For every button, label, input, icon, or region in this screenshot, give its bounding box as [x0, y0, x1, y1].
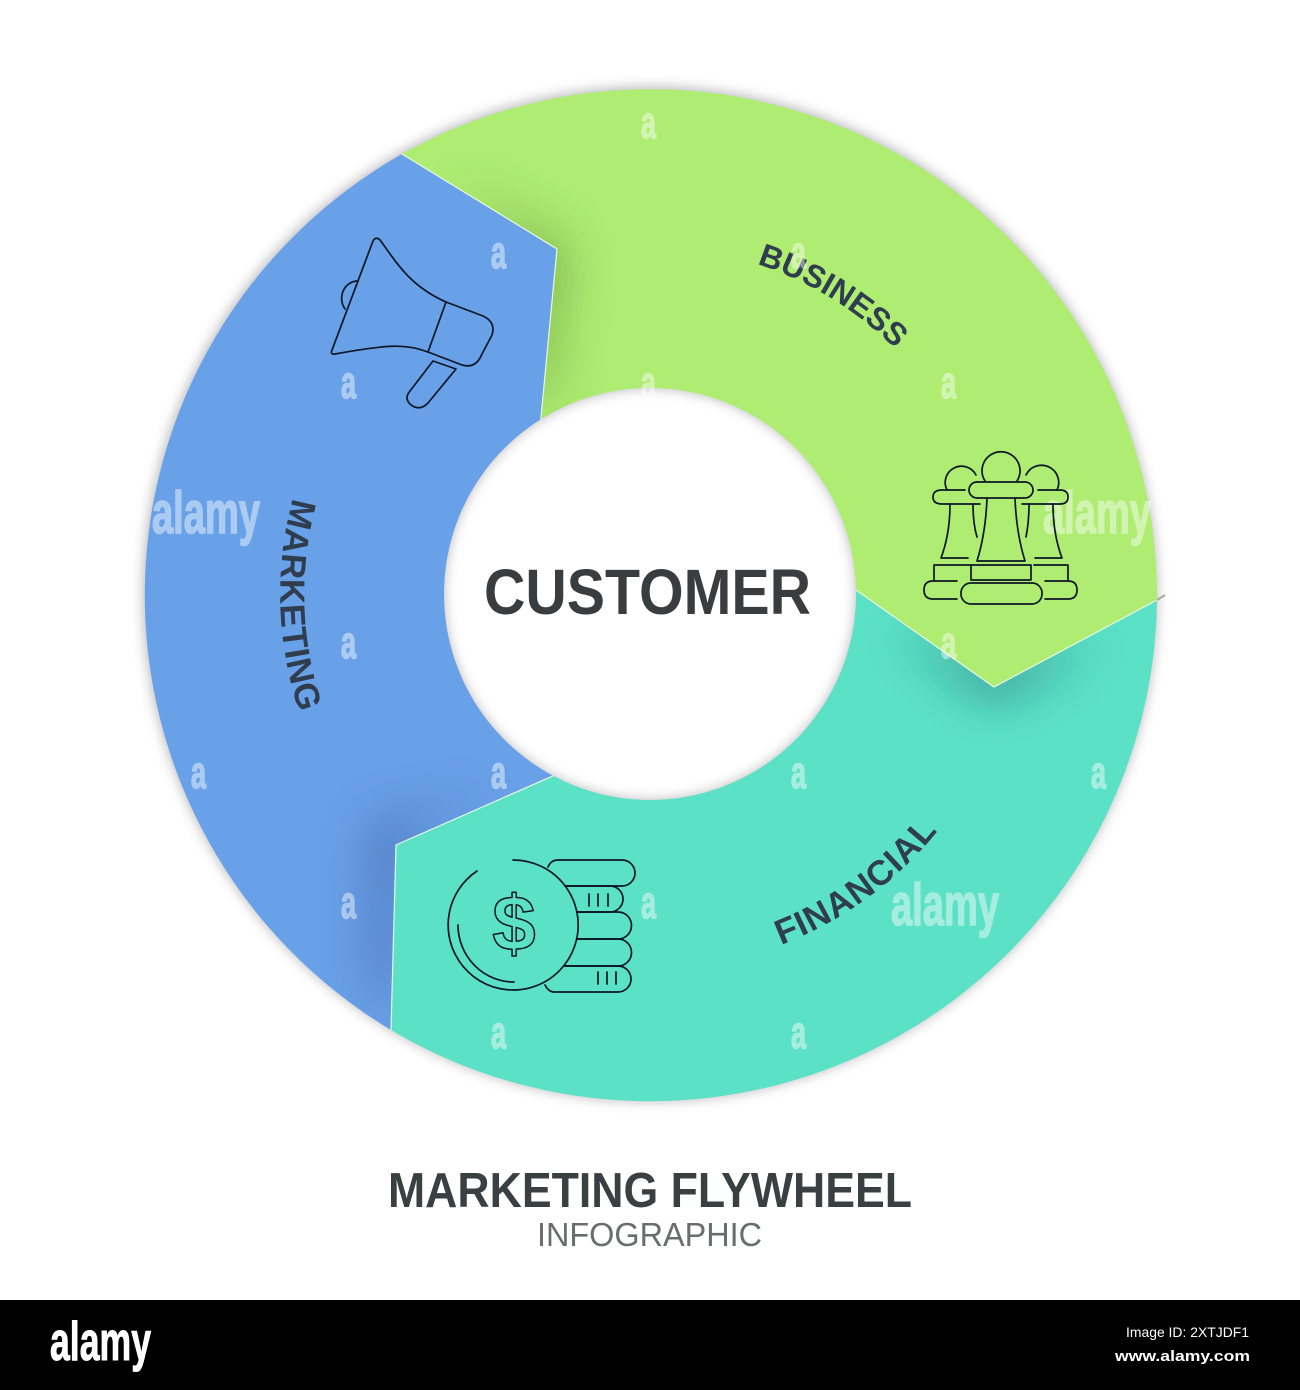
watermark letters: a: [491, 1007, 507, 1058]
watermark letters: a: [941, 617, 957, 668]
watermark letters: a: [341, 357, 357, 408]
heading: marketing flywheel: MARKETING FLYWHEEL: [388, 1164, 912, 1218]
watermark letters: a: [641, 877, 657, 928]
icon: chess pieces: [924, 452, 1077, 604]
watermark letters: alamy: [891, 872, 999, 938]
shadow cast on teal segment: [890, 625, 1100, 700]
segment edge highlights: [391, 154, 1157, 1030]
edge artifact: [1157, 595, 1165, 600]
watermark over business label: a: [791, 227, 807, 278]
watermark letters: a: [641, 97, 657, 148]
watermark letters: a: [341, 617, 357, 668]
watermark letters: a: [491, 747, 507, 798]
icon: dollar coins: $: [492, 879, 536, 967]
watermark letters: alamy: [1043, 480, 1151, 546]
center title: customer: CUSTOMER: [484, 556, 811, 628]
watermark letters: a: [1091, 747, 1107, 798]
footer url: www.alamy.com: [1114, 1348, 1250, 1365]
footer bar: [0, 1300, 1300, 1390]
footer logo: alamy: [50, 1310, 151, 1372]
watermark letters: a: [791, 747, 807, 798]
icon: megaphone: [331, 238, 493, 408]
icon: dollar coins: [448, 860, 635, 992]
shadow cast on blue segment: [348, 798, 448, 1004]
label: business: BUSINESS: [759, 244, 907, 346]
ring drop shadow: [143, 87, 1157, 1101]
watermark letters: a: [341, 877, 357, 928]
segment: business (green): [402, 89, 1157, 687]
watermark letters: a: [641, 357, 657, 408]
label: marketing: MARKETING: [280, 500, 320, 710]
watermark letters: a: [941, 357, 957, 408]
shadow cast on green segment: [484, 198, 586, 410]
watermark letters: a: [491, 227, 507, 278]
segment: financial (teal): [391, 590, 1157, 1101]
watermark letters: a: [791, 1007, 807, 1058]
footer image id: Image ID: 2XTJDF1: [1126, 1324, 1249, 1340]
subheading: infographic: INFOGRAPHIC: [537, 1216, 762, 1253]
label: financial: FINANCIAL: [774, 826, 937, 944]
watermark letters: alamy: [152, 480, 260, 546]
watermark letters: a: [191, 747, 207, 798]
segment: marketing (blue): [145, 154, 557, 1030]
watermark letters: [152, 97, 1151, 1058]
flywheel ring: [145, 89, 1157, 1101]
